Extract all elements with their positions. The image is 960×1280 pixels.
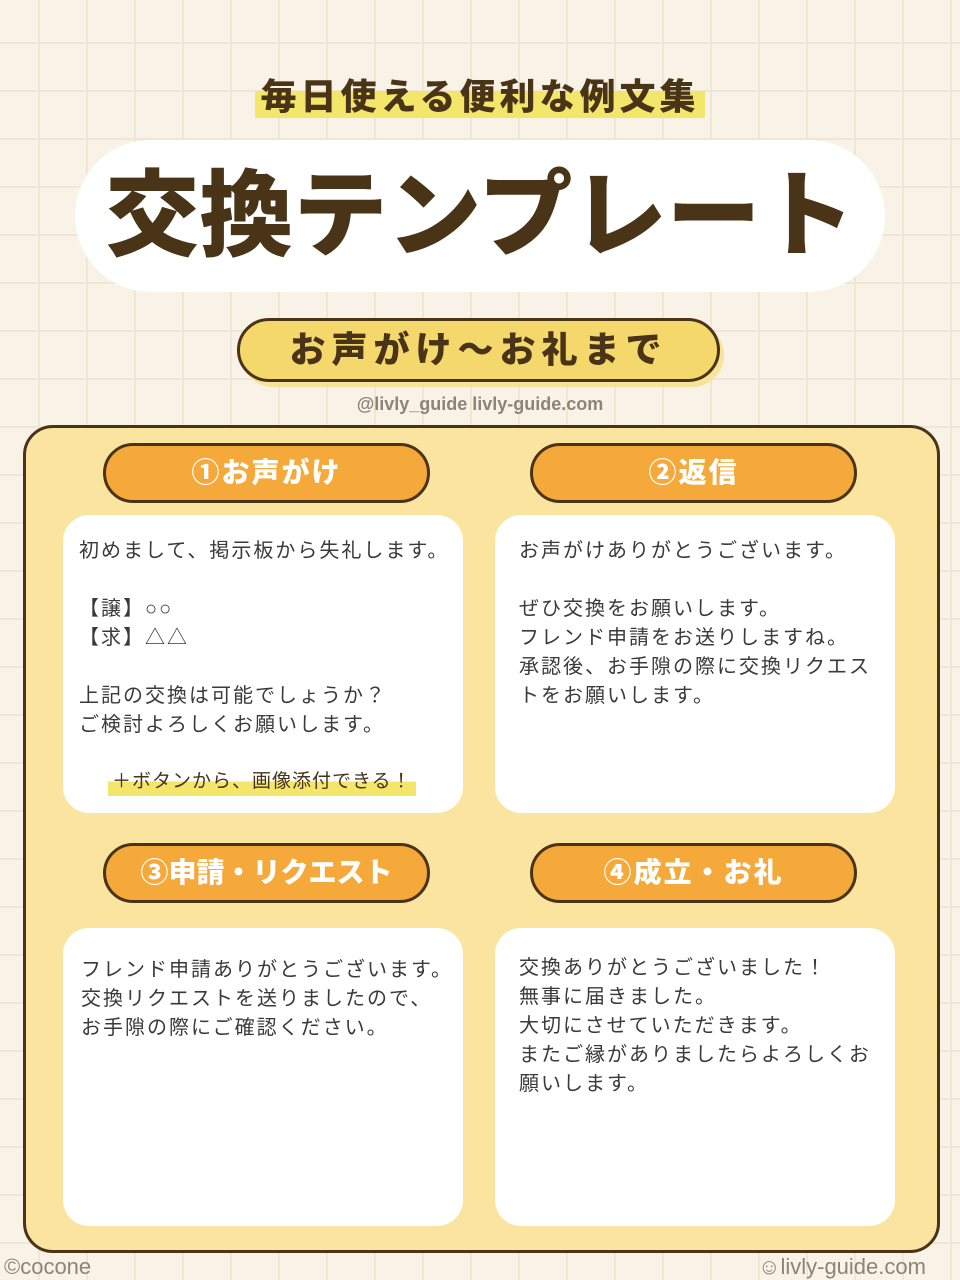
pill: scope [237, 318, 720, 382]
card 2: お声がけありがとうございます。 [519, 540, 847, 562]
card 4: 交換ありがとうございました！ [519, 957, 827, 979]
heading 2 [530, 443, 857, 503]
card 4: 無事に届きました。 [519, 986, 717, 1008]
card 2 [495, 515, 895, 813]
heading 3: ③申請・リクエスト [140, 857, 392, 888]
card 1: 上記の交換は可能でしょうか？ [79, 685, 387, 707]
title: 交換テンプレート [105, 163, 855, 268]
card 3: フレンド申請ありがとうございます。 [81, 959, 453, 981]
heading 3 [103, 843, 430, 903]
heading 1: ①お声がけ [191, 457, 342, 488]
subtitle: 毎日使える便利な例文集 [261, 76, 699, 117]
footer right: ☺livly-guide.com [758, 1254, 926, 1279]
card 4: 願いします。 [519, 1073, 649, 1095]
note: ＋ボタンから、画像添付できる！ [112, 771, 412, 792]
footer left: ©cocone [4, 1254, 91, 1279]
heading 1 [103, 443, 430, 503]
card 2: フレンド申請をお送りしますね。 [519, 627, 849, 649]
card 1: 【求】△△ [79, 627, 189, 649]
card 4: またご縁がありましたらよろしくお [519, 1044, 871, 1066]
card 3: 交換リクエストを送りましたので、 [81, 988, 432, 1010]
card 2: ぜひ交換をお願いします。 [519, 598, 781, 620]
handle text: @livly_guide livly-guide.com [357, 394, 603, 414]
card 1: ご検討よろしくお願いします。 [79, 714, 385, 736]
pill: scope: お声がけ～お礼まで [289, 329, 668, 370]
card 3 [63, 928, 463, 1226]
card 4 [495, 928, 895, 1226]
card 1: 初めまして、掲示板から失礼します。 [79, 540, 449, 562]
main panel [23, 425, 940, 1253]
card 3: お手隙の際にご確認ください。 [81, 1017, 389, 1039]
heading 4 [530, 843, 857, 903]
card 1 [63, 515, 463, 813]
heading 2: ②返信 [648, 457, 738, 488]
card 2: トをお願いします。 [519, 685, 715, 707]
heading 4: ④成立・お礼 [603, 857, 784, 888]
card 1: 【譲】○○ [79, 598, 173, 620]
title cloud [75, 140, 885, 292]
card 4: 大切にさせていただきます。 [519, 1015, 803, 1037]
card 2: 承認後、お手隙の際に交換リクエス [519, 656, 871, 678]
